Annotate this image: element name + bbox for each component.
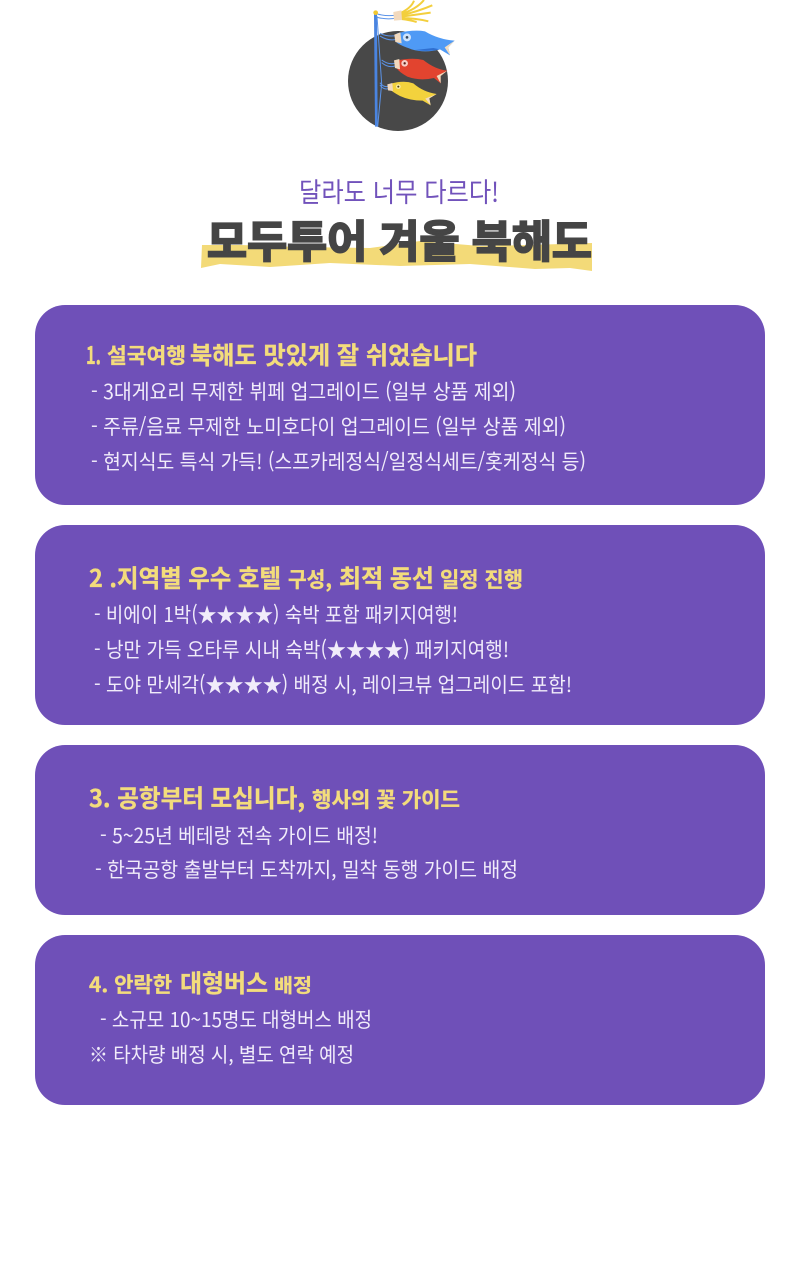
list 2: - 비에이 1박(★★★★) 숙박 포함 패키지여행! — [94, 598, 458, 628]
list 4: ※ 타차량 배정 시, 별도 연락 예정 — [89, 1038, 354, 1068]
list 3: - 5~25년 베테랑 전속 가이드 배정! — [100, 819, 378, 849]
panel: 1 winter cuisine and rest — [35, 305, 765, 505]
panel: 4 large bus — [35, 935, 765, 1105]
list 3 — [95, 819, 518, 883]
title: 모두투어 겨울 북해도 — [207, 206, 592, 270]
list 4 — [89, 1003, 372, 1068]
list 3: - 한국공항 출발부터 도착까지, 밀착 동행 가이드 배정 — [95, 853, 518, 883]
heading 2: 구성, — [288, 564, 332, 594]
heading 4: 4. 안락한 — [89, 969, 172, 999]
heading 2 — [89, 560, 523, 595]
list 1: - 3대게요리 무제한 뷔페 업그레이드 (일부 상품 제외) — [91, 375, 516, 405]
heading 1: 설국여행 — [107, 340, 186, 370]
list 1 — [91, 375, 586, 475]
heading 2: 2 .지역별 우수 호텔 — [89, 560, 281, 595]
heading 4: 배정 — [274, 971, 312, 998]
heading 3 — [89, 780, 460, 815]
heading 2: 최적 동선 — [339, 560, 434, 595]
subtitle: 달라도 너무 다르다! — [299, 171, 499, 210]
list 2: - 도야 만세각(★★★★) 배정 시, 레이크뷰 업그레이드 포함! — [94, 668, 572, 698]
heading 2: 일정 진행 — [440, 564, 523, 594]
heading 3: 행사의 꽃 가이드 — [312, 784, 460, 814]
heading 1: 북해도 맛있게 잘 쉬었습니다 — [190, 337, 477, 372]
title highlight brush — [201, 241, 592, 271]
list 4: - 소규모 10~15명도 대형버스 배정 — [100, 1003, 372, 1033]
list 1: - 주류/음료 무제한 노미호다이 업그레이드 (일부 상품 제외) — [91, 410, 566, 440]
heading 1: 1. — [86, 336, 101, 371]
list 1: - 현지식도 특식 가득! (스프카레정식/일정식세트/홋케정식 등) — [91, 445, 586, 475]
list 2 — [94, 598, 572, 698]
heading 3: 3. 공항부터 모십니다, — [89, 780, 305, 815]
panel: 2 hotels and routes — [35, 525, 765, 725]
icon: koi streamers on dark circle — [348, 0, 455, 131]
panel: 3 airport guide — [35, 745, 765, 915]
heading 4: 대형버스 — [180, 965, 268, 1000]
heading 4 — [89, 965, 312, 1000]
list 2: - 낭만 가득 오타루 시내 숙박(★★★★) 패키지여행! — [94, 633, 509, 663]
